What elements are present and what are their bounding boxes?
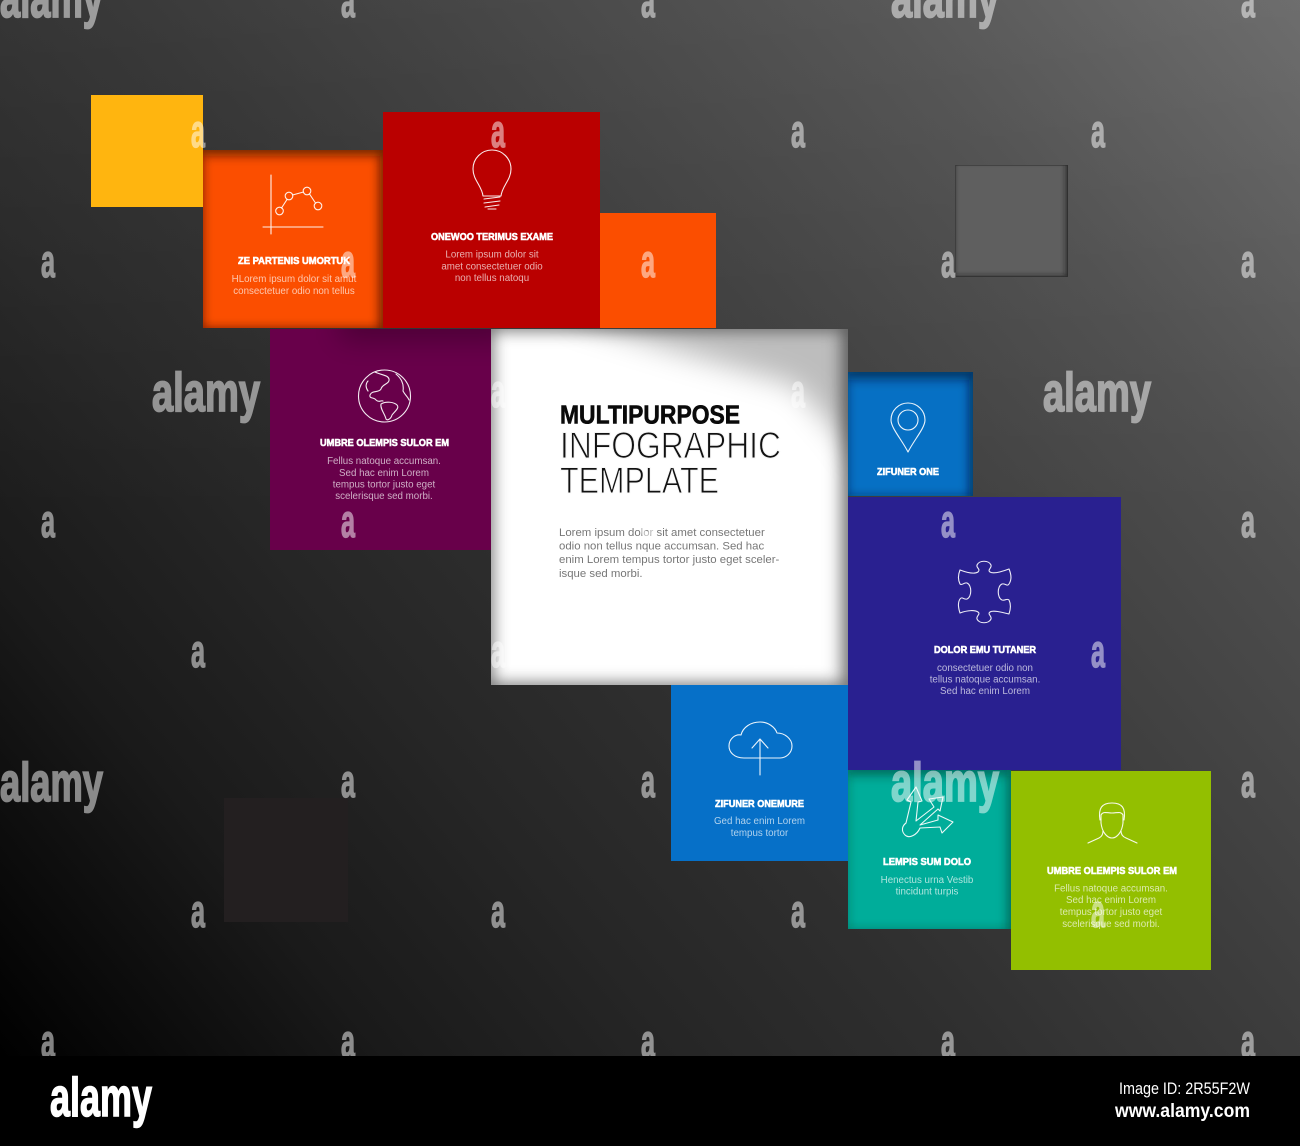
body text: tincidunt turpis: [896, 886, 959, 898]
watermark pattern: a: [341, 1015, 355, 1067]
watermark pattern: alamy: [152, 361, 260, 423]
heading: ZIFUNER ONE: [877, 466, 939, 478]
panel background: [383, 112, 600, 328]
watermark pattern: a: [341, 495, 355, 547]
watermark pattern: a: [641, 755, 655, 807]
panel: onewoo: [383, 112, 600, 328]
panel background: [671, 685, 848, 861]
body text: Ged hac enim Lorem: [714, 816, 805, 827]
watermark pattern: a: [1241, 495, 1255, 547]
icon: globe: [358, 370, 410, 422]
body text: [1054, 884, 1168, 930]
watermark pattern: a: [1241, 755, 1255, 807]
intro text: Lorem ipsum dolor sit amet consectetuer: [559, 527, 765, 539]
heading: ONEWOO TERIMUS EXAME: [431, 231, 553, 243]
footer bar: [0, 1056, 1300, 1146]
icon: puzzle piece: [958, 561, 1011, 623]
decorative square: near-black: [224, 798, 348, 922]
heading: infographic: INFOGRAPHIC: [560, 424, 781, 466]
intro text: isque sed morbi.: [559, 568, 643, 580]
panel: green umbre: [1011, 771, 1211, 970]
body text: [881, 875, 974, 898]
body text: tempus tortor: [731, 828, 789, 839]
watermark pattern: a: [41, 1015, 55, 1067]
body text: consectetuer odio non tellus: [233, 286, 355, 297]
watermark pattern: a: [491, 105, 505, 157]
panel background with inner shadow: [199, 146, 387, 332]
footer logo: alamy: [50, 1066, 152, 1128]
watermark pattern: a: [491, 625, 505, 677]
panel: purple umbre: [270, 329, 491, 550]
body text: Sed hac enim Lorem: [339, 468, 429, 479]
white tile with soft inner shadow: [491, 329, 848, 685]
panel: dolor emu: [848, 497, 1121, 770]
body text: tempus tortor justo eget: [333, 480, 435, 490]
icon: person: [1088, 803, 1137, 843]
panel background with inner shadow: [848, 770, 1011, 929]
body text: [232, 274, 357, 297]
watermark pattern: a: [41, 495, 55, 547]
body text: Fellus natoque accumsan.: [327, 456, 441, 467]
panel background: [848, 497, 1121, 770]
panel background: [1011, 771, 1211, 970]
body text: [714, 816, 805, 839]
body text: consectetuer odio non: [937, 663, 1033, 674]
panel background: [270, 329, 491, 550]
heading: multipurpose: MULTIPURPOSE: [560, 400, 740, 430]
watermark pattern: alamy: [891, 751, 999, 813]
body text: Henectus urna Vestib: [881, 875, 974, 886]
body text: Sed hac enim Lorem: [940, 686, 1030, 697]
watermark pattern: a: [1091, 885, 1105, 937]
watermark pattern: a: [341, 755, 355, 807]
watermark pattern: a: [941, 495, 955, 547]
heading: template: TEMPLATE: [560, 459, 719, 501]
watermark pattern: a: [1091, 625, 1105, 677]
website: www.alamy.com: [1114, 1101, 1250, 1122]
watermark pattern: a: [191, 105, 205, 157]
watermark pattern: alamy: [1043, 361, 1151, 423]
watermark pattern: a: [191, 885, 205, 937]
icon: cloud upload: [729, 722, 792, 775]
icon: light bulb: [473, 150, 511, 209]
icon: line chart: [263, 175, 323, 234]
heading: ZE PARTENIS UMORTUK: [238, 255, 350, 267]
watermark pattern: a: [191, 625, 205, 677]
intro text: enim Lorem tempus tortor justo eget sceler-: [559, 554, 780, 566]
body text: non tellus natoqu: [455, 273, 529, 284]
watermark pattern: a: [941, 1015, 955, 1067]
decorative square: grey inset: [952, 160, 1068, 278]
intro text: [559, 527, 780, 580]
body text: HLorem ipsum dolor sit amut: [232, 274, 357, 285]
panel: title: [491, 329, 848, 685]
heading: UMBRE OLEMPIS SULOR EM: [320, 437, 449, 449]
watermark pattern: a: [1091, 105, 1105, 157]
watermark pattern: a: [1241, 235, 1255, 287]
watermark pattern: a: [41, 235, 55, 287]
watermark pattern: a: [1241, 1015, 1255, 1067]
watermark pattern: a: [491, 365, 505, 417]
watermark pattern: a: [641, 235, 655, 287]
watermark pattern: a: [791, 105, 805, 157]
panel: lempis: [848, 770, 1011, 929]
watermark pattern: a: [641, 1015, 655, 1067]
decorative square: yellow: [91, 95, 203, 207]
body text: [327, 456, 441, 502]
panel: zifuner one: [848, 372, 973, 496]
body text: Fellus natoque accumsan.: [1054, 884, 1168, 894]
heading: DOLOR EMU TUTANER: [934, 644, 1036, 656]
icon: diverging arrows: [902, 787, 953, 837]
body text: scelerisque sed morbi.: [1062, 919, 1160, 930]
heading: ZIFUNER ONEMURE: [715, 798, 804, 810]
body text: amet consectetuer odio: [441, 262, 543, 272]
image id: Image ID: 2R55F2W: [1119, 1079, 1250, 1098]
body text: Lorem ipsum dolor sit: [445, 250, 539, 260]
watermark pattern: a: [491, 885, 505, 937]
watermark pattern: a: [791, 885, 805, 937]
body text: [930, 663, 1040, 697]
panel: zifuner onemure: [671, 685, 848, 861]
watermark pattern: a: [941, 235, 955, 287]
heading: UMBRE OLEMPIS SULOR EM: [1047, 865, 1177, 877]
panel background with inner shadow: [848, 372, 973, 496]
watermark pattern: a: [791, 625, 805, 677]
body text: [441, 250, 543, 284]
body text: scelerisque sed morbi.: [335, 491, 433, 502]
panel: ze partenis: [199, 146, 387, 332]
watermark pattern: a: [791, 365, 805, 417]
body text: tempus tortor justo eget: [1060, 907, 1162, 918]
watermark pattern: a: [641, 495, 655, 547]
watermark pattern: a: [341, 235, 355, 287]
body text: tellus natoque accumsan.: [930, 674, 1040, 686]
watermark pattern: alamy: [0, 751, 103, 813]
intro text: odio non tellus nque accumsan. Sed hac: [559, 540, 764, 552]
icon: map pin: [891, 403, 925, 452]
decorative square: orange: [600, 213, 716, 328]
heading: LEMPIS SUM DOLO: [883, 856, 971, 868]
body text: Sed hac enim Lorem: [1066, 895, 1156, 906]
